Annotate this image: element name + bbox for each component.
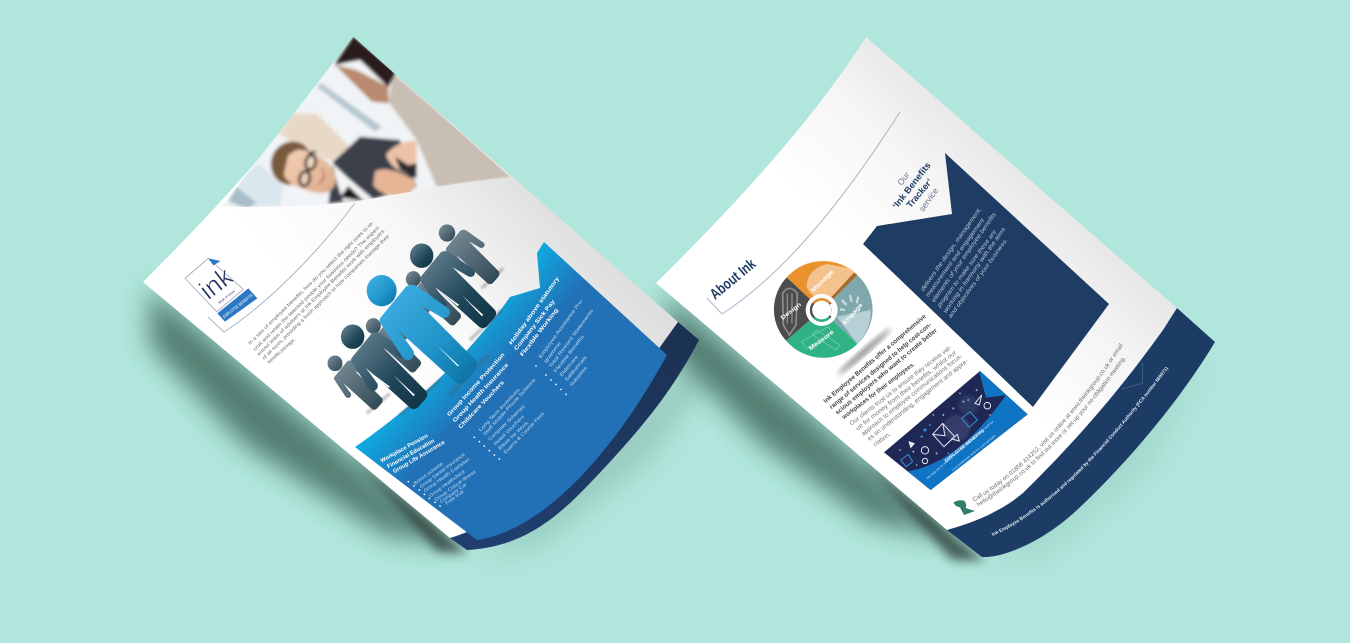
benefits column 2: Group Income Protection	[446, 352, 507, 418]
glasses	[298, 154, 317, 187]
heading: about ink: About Ink	[707, 255, 760, 303]
employee benefits image box	[884, 371, 1028, 490]
benefits column 2: Bikes for Work	[497, 420, 530, 451]
paper	[656, 37, 1177, 530]
benefits column 3: Total Reward Statements	[548, 308, 595, 369]
panel text: measurement and engagement	[925, 218, 986, 299]
benefits column 3: Sabbaticals	[564, 354, 588, 382]
contact details: hello@theinkgroup.co.uk to find out more or set up your no-obligation meeting.	[976, 358, 1126, 506]
wheel hub	[806, 294, 838, 326]
benefits column 1	[380, 433, 477, 507]
heading: ink benefits tracker: service	[917, 186, 940, 213]
benefits column 3: Holiday above statutory	[508, 275, 562, 346]
benefits column 1: Group Health Cashplan	[423, 457, 471, 493]
benefits column 2: Group Health Insurance	[452, 362, 510, 424]
benefits column 3	[508, 275, 595, 395]
intro text: cruit and retain the talented people your business needs? The experi-	[252, 224, 382, 352]
wheel segment: measure	[786, 310, 857, 358]
benefits column 1: Group Dental Insurance	[419, 452, 466, 489]
heading: ink benefits tracker: ‘Ink Benefits	[890, 160, 933, 211]
benefits column 2: Childcare Vouchers	[458, 380, 506, 430]
about text: bold paragraph: range of services designed to help cost-con-	[828, 322, 933, 411]
main blue figure	[367, 275, 477, 384]
decorative notch line	[1122, 362, 1143, 389]
benefits column 3: Employee Assistance Pro-	[538, 297, 584, 359]
paper	[143, 37, 678, 538]
panel text: elements of your employee benefits	[931, 212, 998, 304]
employee benefits image box: We help you to source and manage benefits that really work for	[926, 420, 994, 480]
benefits column 1: Bonus scheme	[413, 461, 445, 486]
intro text: benefits package.	[266, 337, 297, 365]
suit	[328, 137, 417, 204]
about text: second paragraph: ue for money from their benefits, whilst our	[855, 349, 958, 432]
benefits column 2: Staff Mobile Phone Scheme	[482, 377, 537, 437]
logo: ink employee benefits: think of more	[217, 289, 236, 305]
wheel segment: manage: Manage	[811, 268, 836, 294]
hands	[373, 169, 417, 197]
intro text: In a sea of employee benefits, how do you select the right ones to re-	[247, 220, 376, 346]
tie	[340, 186, 364, 201]
wheel segment: manage	[787, 261, 857, 310]
benefits column 3: gramme	[543, 340, 563, 364]
panel text: delivers the design, management,	[920, 207, 983, 293]
logo: ink employee benefits	[185, 258, 257, 322]
figure shadows	[367, 268, 503, 415]
benefits column 3: Company Sick Pay	[514, 298, 557, 352]
panel text: program to make sure these are	[936, 229, 999, 310]
panel text: and objectives of your business.	[948, 238, 1009, 320]
contact text: Call us today on 01858 414252, visit us online at www.theinkgroup.co.uk or email	[972, 343, 1123, 501]
dark figures	[410, 243, 496, 328]
about text: bold paragraph: Ink Employee Benefits offer a comprehensive	[822, 313, 928, 405]
icon: contact person	[953, 500, 975, 515]
about text: second paragraph: ciation.	[872, 431, 893, 448]
wheel segment: measure: Measure	[808, 329, 836, 352]
flyer: employee benefits (left)	[143, 30, 699, 550]
panel text: working in harmony with the aims	[943, 227, 1007, 314]
benefits column 1: Workplace Pension	[380, 433, 430, 464]
photo: businessmen in meeting	[222, 36, 510, 207]
shirt	[333, 163, 373, 202]
navy back strip	[450, 322, 699, 550]
right person hair	[335, 35, 397, 87]
heading: ink benefits tracker: Our	[895, 170, 912, 187]
blue band	[908, 395, 1028, 490]
hair	[269, 139, 311, 187]
about text: second paragraph: approach to employee communications focus-	[860, 353, 964, 438]
face	[283, 150, 336, 193]
wall	[278, 113, 352, 162]
decorative bracket line	[208, 203, 355, 332]
benefits column 2	[446, 352, 546, 460]
benefits column 1: Free fruit	[444, 489, 465, 506]
benefits column 1: Company Car	[439, 482, 468, 504]
right person jacket	[388, 73, 517, 187]
decorative bracket line	[707, 112, 900, 314]
window stripes	[317, 83, 382, 132]
heading: ink benefits tracker: Tracker’	[905, 177, 934, 210]
employee benefits image box: your business and for your people.	[951, 433, 997, 472]
mockup scene	[131, 36, 1215, 568]
flyer: about ink (right)	[656, 37, 1215, 557]
benefits column 1: Financial Education	[386, 438, 436, 470]
icons	[901, 395, 991, 467]
benefits column 3: Flexible Working	[519, 307, 560, 358]
benefits column 3: Subsidies	[569, 365, 589, 387]
wheel segment: design: Design	[780, 302, 803, 322]
blue panel text	[380, 275, 595, 507]
smile	[319, 167, 324, 184]
benefits column 2: Retail Vouchers	[493, 414, 526, 446]
about text: bold paragraph: scious employers who want to create better	[834, 327, 939, 417]
background figures	[439, 224, 499, 284]
benefits column 2: Computer Schemes	[487, 403, 526, 442]
benefits column 2: Long Term Incentives	[478, 387, 521, 432]
people group	[328, 224, 503, 415]
logo: ink employee benefits: ink	[194, 261, 239, 305]
about text: bold paragraph: workplaces for their employees.	[840, 361, 916, 421]
wheel diagram	[774, 261, 939, 421]
intro text: enced team of advisers at Ink Employee Benefits work with employers	[256, 228, 387, 357]
wheel shadow	[836, 327, 892, 377]
blue panel	[355, 242, 667, 540]
panel text	[920, 207, 1009, 320]
benefits column 1: Group Healthcheck	[428, 468, 467, 498]
benefits column 2: Exams & Course Fees	[503, 410, 546, 455]
flag	[979, 371, 1006, 398]
intro text: of all sizes, providing a fresh approach to how companies manage their	[261, 234, 391, 361]
benefits column 3: Eldercare	[559, 354, 579, 377]
about text: second paragraph: Our clients trust us to ensure they receive val-	[849, 344, 953, 427]
benefits column 1: Group Critical Illness	[433, 469, 477, 502]
navy footer band	[947, 308, 1215, 557]
contact details	[953, 343, 1168, 536]
footer legal text: Ink Employee Benefits is authorised and regulated by the Financial Conduct Authority (FCA number 669071)	[992, 367, 1168, 536]
wheel segment: engage	[822, 275, 873, 344]
drop shadows	[150, 288, 1210, 561]
right person neck	[335, 65, 388, 103]
employee benefits image box: EMPLOYEE BENEFITS	[943, 428, 985, 463]
about text: second paragraph: es on understanding, engagement and appre-	[866, 358, 970, 443]
navy service panel	[863, 153, 1109, 407]
wheel segment: engage: Engage	[842, 302, 865, 326]
benefits column 3: Flexible Benefits	[553, 334, 585, 373]
benefits column 1: Group Life Assurance	[392, 440, 446, 475]
wheel segment: design	[774, 277, 822, 341]
logo: ink employee benefits: EMPLOYEE BENEFITS	[222, 293, 254, 319]
intro text	[247, 220, 391, 365]
